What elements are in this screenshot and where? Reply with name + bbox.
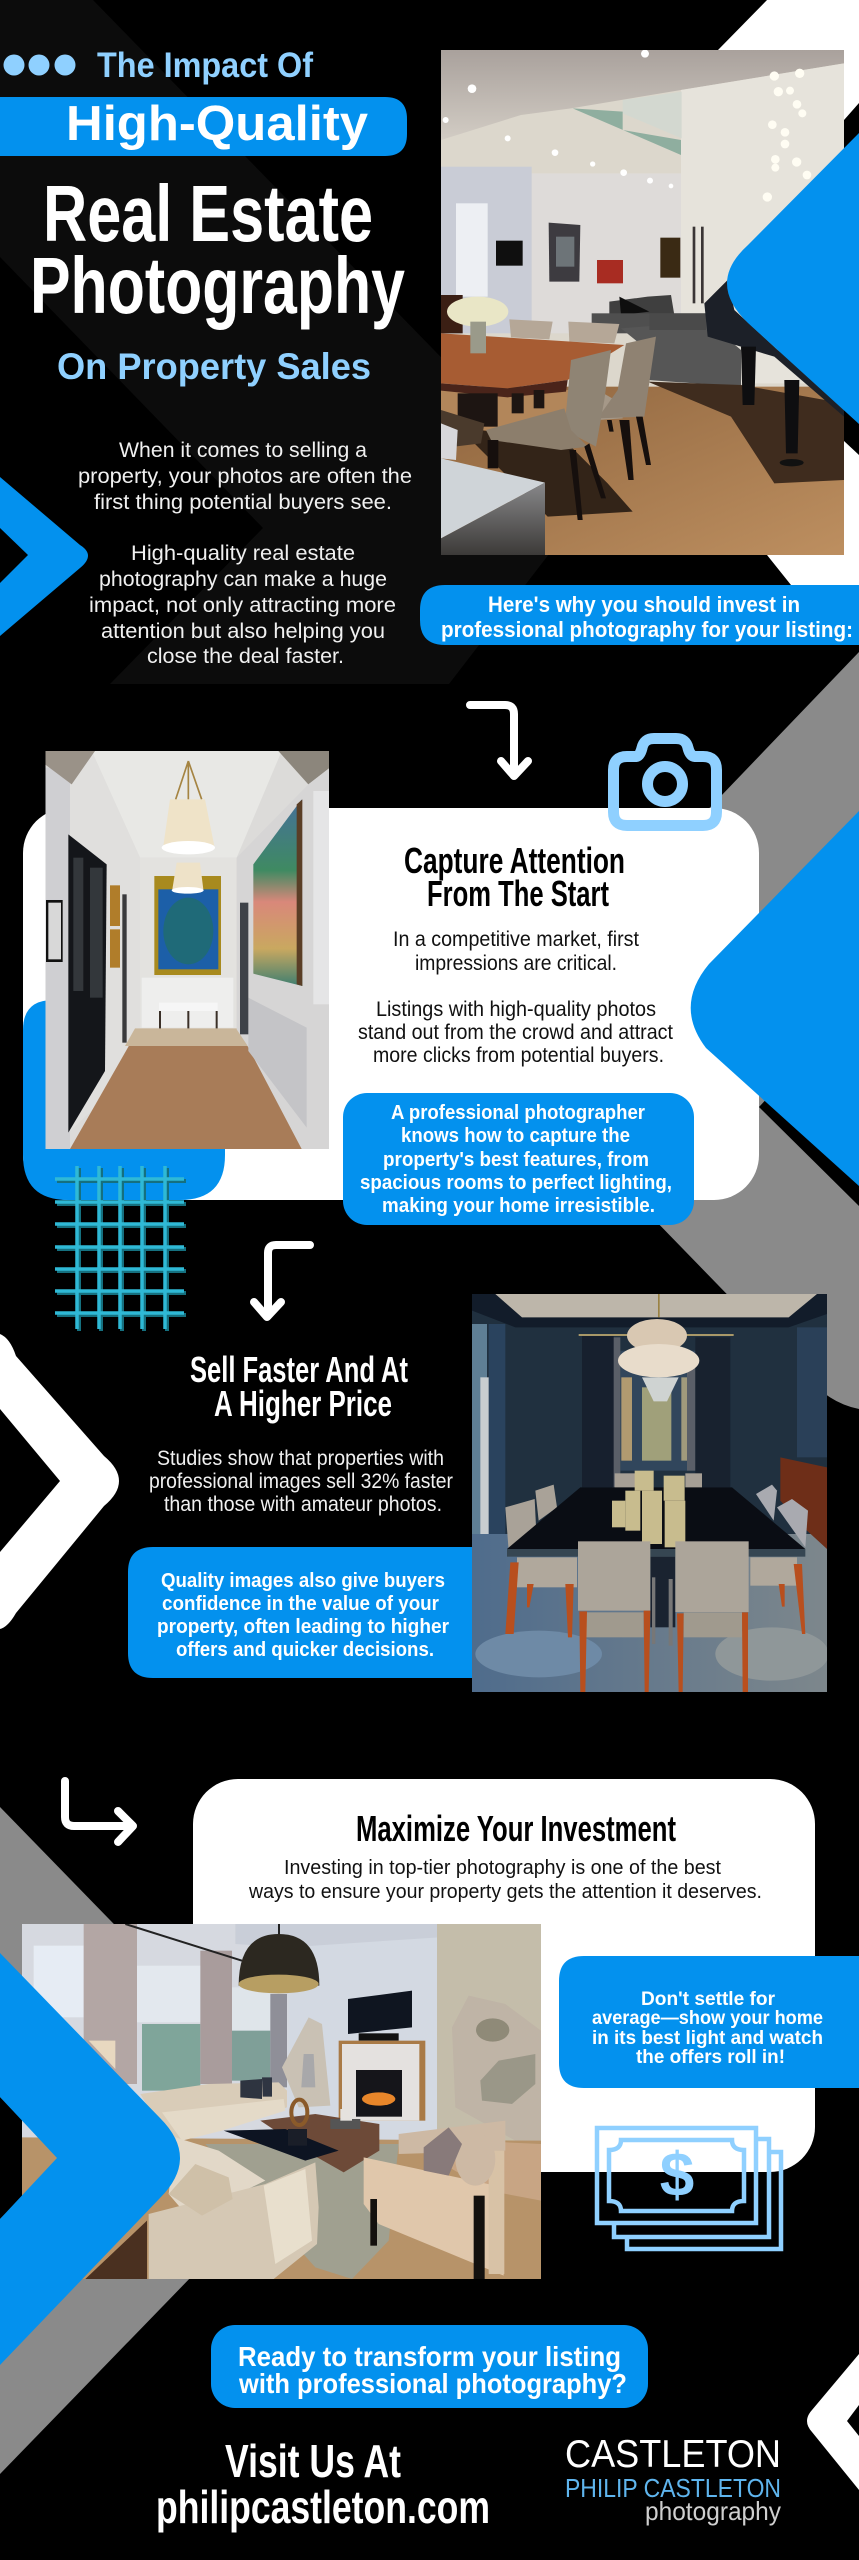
photo: hallway with artwork — [45, 751, 330, 1149]
photo: dining room with chandelier — [472, 1294, 829, 1692]
callout: why invest: Here's why you should invest in — [488, 592, 800, 617]
title line: the impact of: The Impact Of — [97, 46, 313, 85]
body text: more clicks from potential buyers. — [373, 1044, 664, 1067]
arrow: to first section — [470, 705, 528, 776]
icon: camera — [614, 738, 716, 826]
card background — [23, 808, 759, 1200]
visit us text: Visit Us At — [225, 2435, 401, 2487]
body text: stand out from the crowd and attract — [358, 1021, 673, 1044]
body text: ways to ensure your property gets the attention it deserves. — [248, 1881, 762, 1903]
body text — [149, 1447, 453, 1516]
intro text: close the deal faster. — [147, 645, 344, 668]
title pill: high-quality: High-Quality — [66, 97, 368, 151]
header title block — [0, 46, 407, 387]
callout: professional photographer: A professional photographer — [391, 1101, 645, 1124]
blue accent block — [23, 1000, 225, 1200]
body text — [248, 1857, 762, 1903]
heading: From The Start — [427, 873, 609, 914]
body text: impressions are critical. — [415, 952, 617, 975]
call to action: with professional photography? — [238, 2368, 627, 2399]
intro text: first thing potential buyers see. — [94, 491, 392, 514]
heading — [190, 1349, 408, 1424]
panel: capture attention — [23, 808, 759, 1200]
decorative blue chevron over photo — [727, 133, 859, 424]
decorative white chevron top right — [700, 0, 859, 170]
intro text: attention but also helping you — [101, 620, 385, 643]
callout: don't settle: the offers roll in! — [636, 2047, 785, 2068]
heading: Maximize Your Investment — [356, 1808, 676, 1849]
callout: why invest — [420, 585, 859, 645]
logo: castleton: CASTLETON — [565, 2433, 781, 2476]
icon: stack of money: $ — [660, 2141, 694, 2210]
arrow: to third section — [65, 1781, 133, 1842]
callout: quality images — [128, 1547, 480, 1678]
body text: than those with amateur photos. — [164, 1493, 442, 1516]
heading: A Higher Price — [214, 1383, 392, 1424]
heading: Sell Faster And At — [190, 1349, 408, 1390]
intro text — [78, 439, 412, 668]
intro text: impact, not only attracting more — [89, 594, 396, 617]
body text: Studies show that properties with — [157, 1447, 444, 1470]
callout: professional photographer: property's best features, from — [383, 1148, 649, 1171]
logo: castleton: photography — [645, 2496, 781, 2526]
card background — [193, 1779, 815, 2172]
intro text: High-quality real estate — [131, 542, 355, 565]
icon: stack of money — [597, 2128, 781, 2249]
visit us text: philipcastleton.com — [156, 2481, 490, 2533]
callout: don't settle: average—show your home — [592, 2008, 823, 2029]
photo: interior with dining table and piano — [441, 50, 844, 555]
visit us text — [156, 2435, 490, 2533]
photo: living room with fireplace — [22, 1924, 541, 2279]
decorative blue chevron left — [0, 477, 88, 636]
callout: professional photographer: knows how to capture the — [401, 1124, 630, 1147]
panel: maximize your investment — [193, 1779, 815, 2172]
body text: In a competitive market, first — [393, 928, 639, 951]
call to action: Ready to transform your listing — [238, 2341, 621, 2372]
intro text: property, your photos are often the — [78, 465, 412, 488]
decorative blue chevron lower left — [0, 1953, 180, 2365]
logo: castleton — [565, 2433, 781, 2526]
callout: don't settle — [559, 1956, 859, 2088]
decorative white band right of photo — [700, 400, 859, 590]
decorative dark chevron behind intro — [0, 0, 586, 684]
decorative grey chevron middle right — [650, 652, 859, 1409]
callout: professional photographer: spacious rooms to perfect lighting, — [360, 1171, 672, 1194]
decorative grey chevron lower left — [0, 1807, 324, 2474]
intro text: When it comes to selling a — [119, 439, 367, 462]
callout: quality images: offers and quicker decisions. — [176, 1638, 434, 1661]
callout: don't settle: in its best light and watch — [592, 2028, 823, 2049]
decorative blue chevron middle right — [691, 811, 859, 1186]
call to action — [211, 2325, 648, 2408]
title pill: high-quality — [0, 97, 407, 156]
body text: Investing in top-tier photography is one of the best — [284, 1857, 721, 1879]
icon: three dots — [4, 54, 76, 76]
arrow: to second section — [254, 1245, 310, 1317]
intro text: photography can make a huge — [99, 568, 387, 591]
body text: Listings with high-quality photos — [376, 998, 656, 1021]
decorative white chevron bottom right — [807, 2354, 859, 2490]
title line: photography: Photography — [30, 241, 405, 330]
callout: quality images: Quality images also give buyers — [161, 1569, 445, 1592]
callout: quality images: property, often leading to higher — [157, 1615, 449, 1638]
inner gap of blue chevron — [0, 2097, 22, 2219]
logo: castleton: PHILIP CASTLETON — [565, 2473, 781, 2503]
callout: professional photographer — [343, 1093, 694, 1225]
body text — [358, 928, 673, 1067]
title line: real estate: Real Estate — [43, 169, 373, 258]
body text: professional images sell 32% faster — [149, 1470, 453, 1493]
decorative white chevron left — [0, 1334, 119, 1629]
panel: sell faster — [128, 1349, 480, 1678]
heading — [404, 840, 625, 914]
title line: on property sales: On Property Sales — [57, 346, 371, 387]
callout: quality images: confidence in the value of your — [162, 1592, 439, 1615]
callout: don't settle: Don't settle for — [641, 1989, 776, 2010]
decorative grid — [55, 1166, 186, 1331]
heading: Capture Attention — [404, 840, 625, 881]
callout: professional photographer: making your home irresistible. — [382, 1194, 655, 1217]
